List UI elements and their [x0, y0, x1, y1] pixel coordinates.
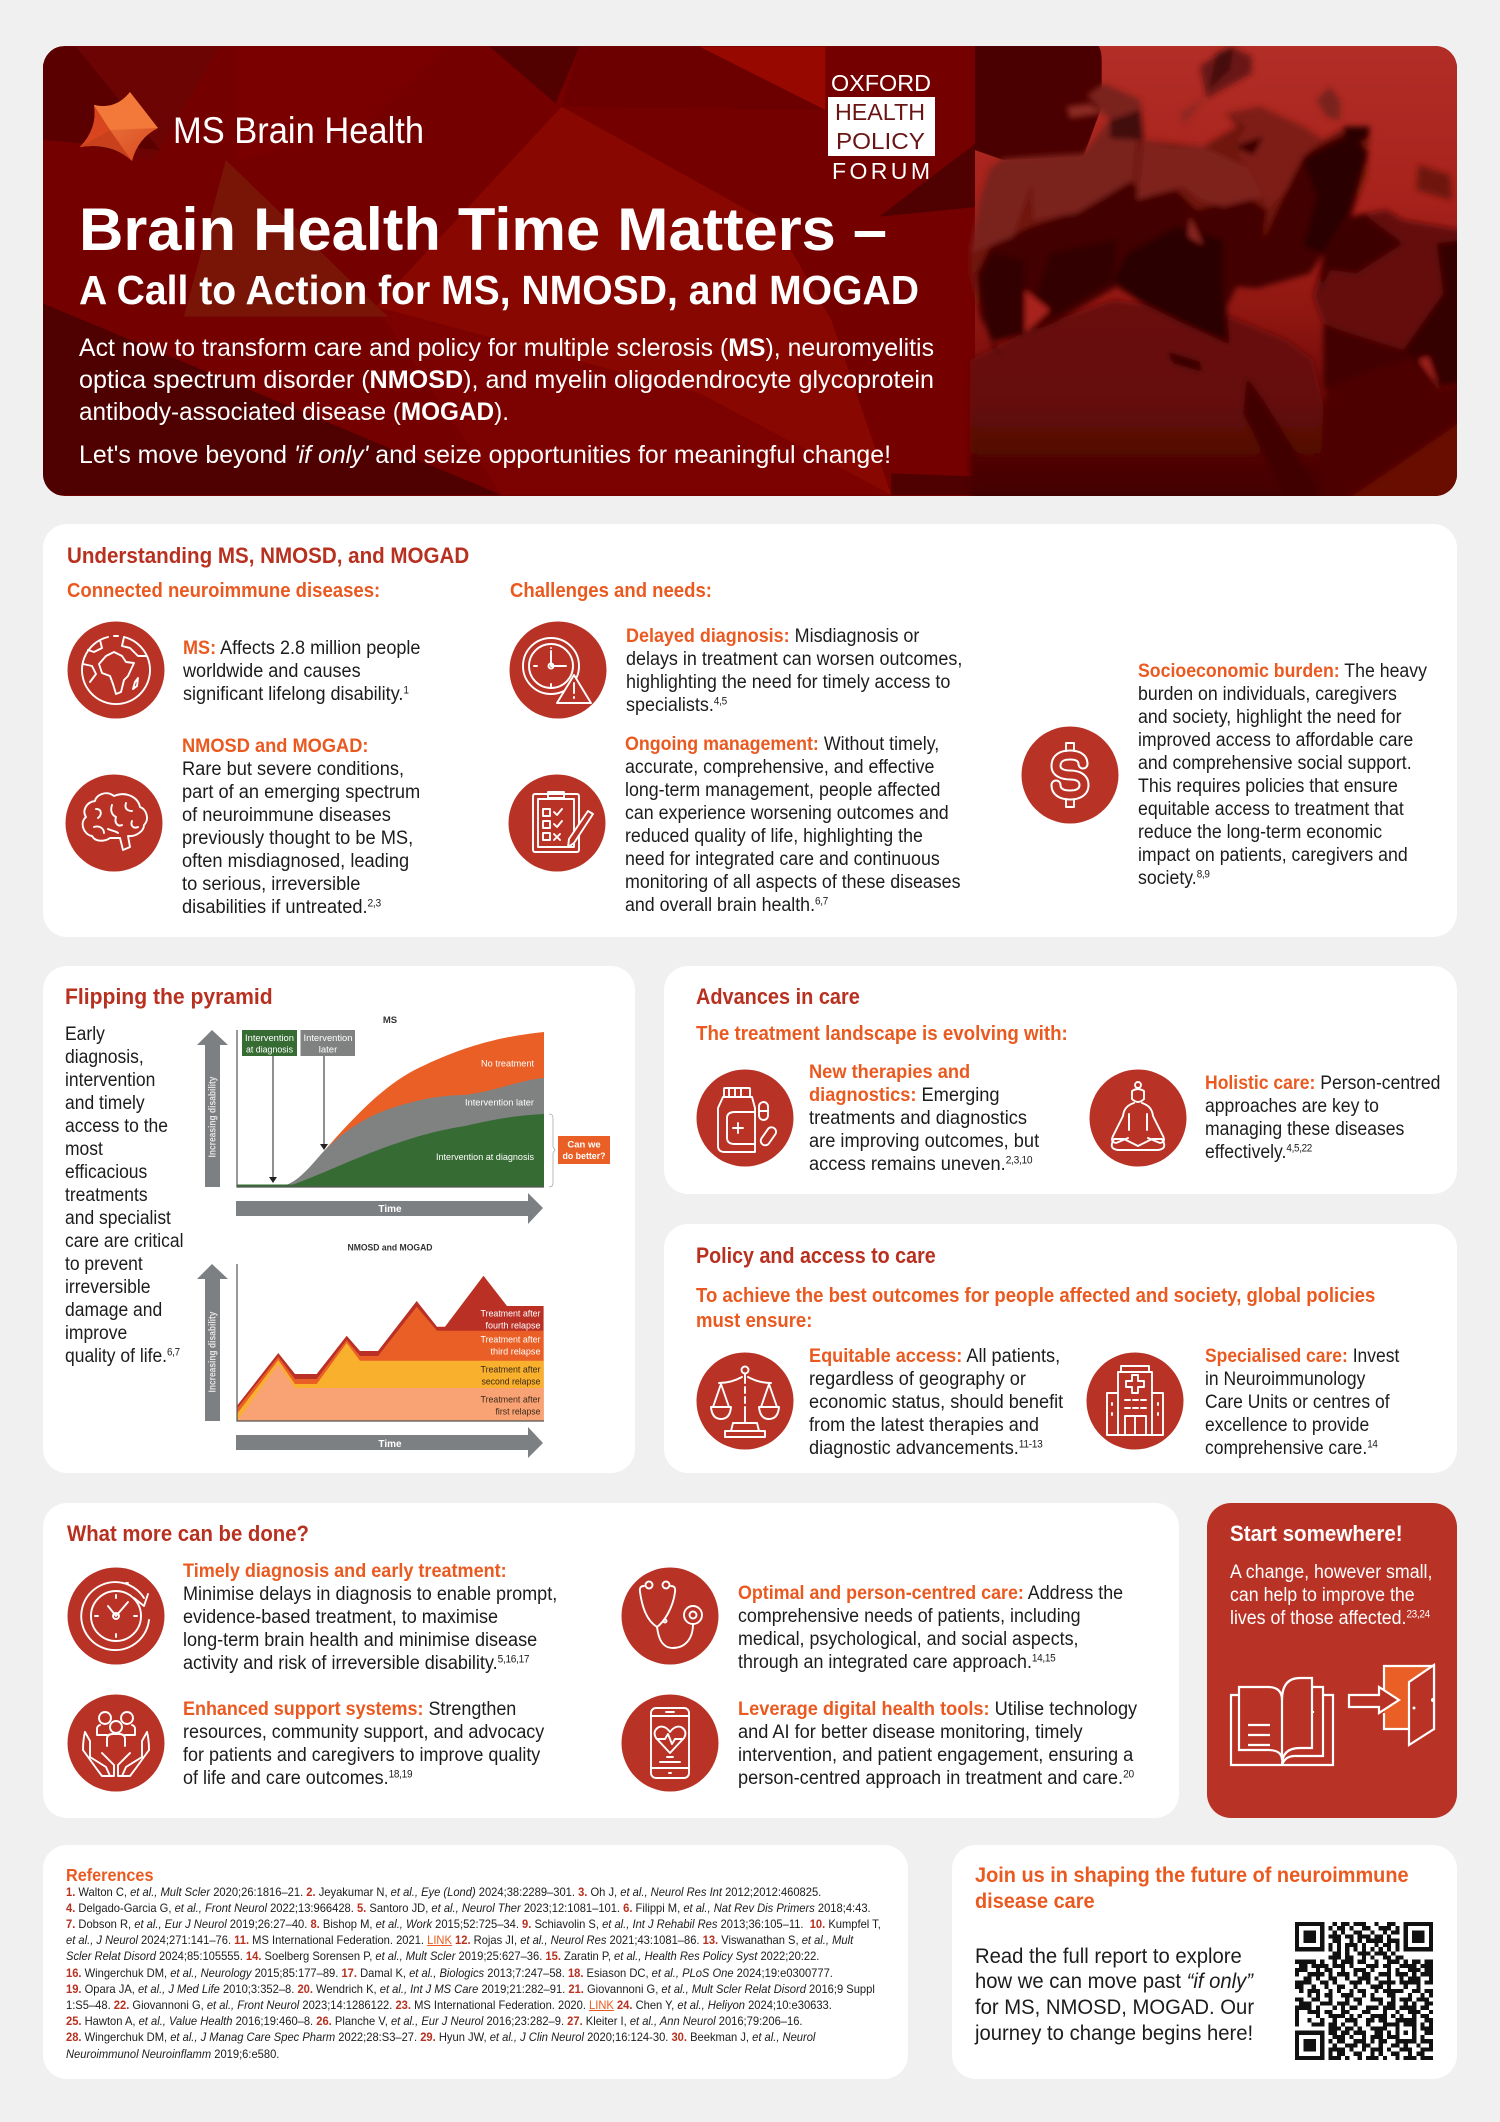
text: early diagnosis: access to the	[65, 1116, 168, 1136]
reference list: 25. Hawton A, et al., Value Health 2016;19:460–8. 26. Planche V, et al., Eur J Neurol 2016;23:282–9. 27. Kleiter I, et al., Ann Neurol 2016;79:206–16.	[66, 2014, 803, 2028]
text: delayed diagnosis: specialists.4,5	[626, 694, 727, 716]
text: enhanced support	[183, 1699, 544, 1789]
reference list: 1:S5–48. 22. Giovannoni G, et al., Front Neurol 2023;14:1286122. 23. MS International Federation. 2020. LINK 24. Chen Y, et al., Heliyon 2024;10:e30633.	[66, 1998, 832, 2012]
text: equitable access: economic status, should benefit	[809, 1392, 1063, 1412]
chart: MS: at diagnosis	[246, 1044, 293, 1056]
icon: stethoscope	[622, 1568, 718, 1664]
text: early diagnosis: and timely	[65, 1092, 145, 1114]
icon: brain	[66, 774, 162, 872]
chart: MS: MS	[383, 1015, 397, 1026]
text: ongoing management: reduced quality of life, highlighting the	[625, 826, 923, 846]
text: early diagnosis: Early	[65, 1024, 105, 1044]
panel: references	[43, 1845, 908, 2079]
text: enhanced support: Enhanced support systems: Strengthen	[183, 1699, 516, 1720]
call to action line: Let's move beyond 'if only' and seize opportunities for meaningful change!	[79, 441, 891, 469]
chart: MS: No treatment	[481, 1058, 534, 1070]
text: MS: MS: Affects 2.8 million people	[183, 638, 420, 659]
chart: NMOSD and MOGAD: Treatment after	[480, 1308, 540, 1320]
text: read the full report: Read the full report to explore	[975, 1944, 1242, 1968]
text: optimal care: Optimal and person-centred care: Address the	[738, 1582, 1123, 1604]
heading: What more can be done?	[67, 1521, 309, 1546]
subheading: connected diseases: Connected neuroimmune diseases:	[67, 580, 380, 602]
text: MS	[183, 638, 420, 705]
heading: References	[66, 1865, 153, 1885]
chart: NMOSD and MOGAD: Treatment after	[480, 1334, 540, 1346]
text: optimal care	[738, 1582, 1123, 1672]
intro text: Act now to transform care and policy for multiple sclerosis (MS), neuromyelitis	[79, 334, 934, 362]
text: socioeconomic burden: society.8,9	[1138, 868, 1210, 888]
text: MS: significant lifelong disability.1	[183, 684, 409, 705]
text: holistic care: approaches are key to	[1205, 1096, 1379, 1117]
icon: clock warning	[510, 622, 606, 718]
text: a change: can help to improve the	[1230, 1584, 1415, 1606]
chart: NMOSD and MOGAD: NMOSD and MOGAD	[348, 1242, 433, 1254]
text: timely diagnosis	[183, 1560, 557, 1674]
text: early diagnosis: quality of life.6,7	[65, 1346, 180, 1366]
panel: join us	[952, 1845, 1457, 2079]
text: enhanced support: resources, community support, and advocacy	[183, 1722, 544, 1743]
icon: people in hands	[68, 1694, 164, 1792]
text: a change: lives of those affected.23,24	[1230, 1608, 1430, 1628]
text: equitable access: regardless of geography or	[809, 1368, 1026, 1390]
text: MS: worldwide and causes	[183, 661, 361, 682]
chart: NMOSD and MOGAD: Time	[378, 1439, 402, 1450]
reference list: 1. Walton C, et al., Mult Scler 2020;26:1816–21. 2. Jeyakumar N, et al., Eye (Lond) 2024;38:2289–301. 3. Oh J, et al., Neurol Res Int 2012;2012:460825.	[66, 1884, 821, 1898]
text: early diagnosis: to prevent	[65, 1254, 143, 1274]
text: timely diagnosis: Minimise delays in diagnosis to enable prompt,	[183, 1584, 557, 1604]
chart: MS: Intervention	[245, 1033, 294, 1044]
text: socioeconomic burden: and society, highlight the need for	[1138, 706, 1402, 728]
text: socioeconomic burden: impact on patients, caregivers and	[1138, 844, 1408, 866]
text: socioeconomic burden: and comprehensive social support.	[1138, 752, 1412, 774]
icon: globe	[68, 622, 164, 718]
text: optimal care: medical, psychological, and social aspects,	[738, 1628, 1079, 1650]
text: NMOSD and MOGAD: of neuroimmune diseases	[182, 804, 391, 826]
text: delayed diagnosis: highlighting the need for timely access to	[626, 672, 950, 692]
text: NMOSD and MOGAD: often misdiagnosed, leading	[182, 850, 409, 872]
text: NMOSD and MOGAD: part of an emerging spectrum	[182, 782, 420, 802]
text: early diagnosis: most	[65, 1138, 103, 1160]
text: early diagnosis: and specialist	[65, 1208, 171, 1228]
icon: dollar	[1022, 726, 1118, 824]
text: a change: A change, however small,	[1230, 1562, 1432, 1582]
text: specialised care: Specialised care: Invest	[1205, 1346, 1399, 1366]
text: read the full report: how we can move past “if only”	[975, 1969, 1253, 1993]
text: specialised care: comprehensive care.14	[1205, 1438, 1378, 1458]
text: enhanced support: of life and care outcomes.18,19	[183, 1768, 412, 1789]
text: socioeconomic burden: burden on individuals, caregivers	[1138, 684, 1397, 704]
text: timely diagnosis: long-term brain health and minimise disease	[183, 1630, 537, 1650]
text: digital health: and AI for better disease monitoring, timely	[738, 1722, 1083, 1743]
text: new therapies: diagnostics: Emerging	[809, 1084, 1000, 1106]
text: digital health	[738, 1699, 1137, 1789]
heading: Advances in care	[696, 984, 860, 1009]
text: early diagnosis: improve	[65, 1322, 127, 1344]
reference list: Neuroimmunol Neuroinflamm 2019;6:e580.	[66, 2047, 279, 2061]
text: socioeconomic burden: This requires policies that ensure	[1138, 776, 1398, 796]
text: ongoing management	[625, 734, 960, 916]
intro text	[79, 334, 934, 426]
chart: NMOSD and MOGAD: Increasing disability	[208, 1311, 218, 1392]
icon: open book and door	[1230, 1662, 1436, 1766]
text: digital health: intervention, and patient engagement, ensuring a	[738, 1745, 1133, 1766]
text: NMOSD and MOGAD: previously thought to be MS,	[182, 828, 413, 848]
chart: NMOSD and MOGAD: fourth relapse	[486, 1320, 540, 1332]
reference list: 19. Opara JA, et al., J Med Life 2010;3:352–8. 20. Wendrich K, et al., Int J MS Care 2019;21:282–91. 21. Giovannoni G, et al., Mult Scler Relat Disord 2016;9 Suppl	[66, 1982, 875, 1996]
text: specialised care: excellence to provide	[1205, 1414, 1369, 1436]
text: new therapies: New therapies and	[809, 1062, 970, 1082]
chart: MS: do better?	[562, 1151, 606, 1162]
text: ongoing management: long-term management, people affected	[625, 780, 940, 800]
text: equitable access: from the latest therapies and	[809, 1414, 1039, 1436]
text: delayed diagnosis: delays in treatment can worsen outcomes,	[626, 648, 962, 670]
text: delayed diagnosis: Delayed diagnosis: Misdiagnosis or	[626, 626, 919, 646]
chart: NMOSD and MOGAD: Treatment after	[480, 1364, 540, 1376]
icon: phone heart	[622, 1694, 718, 1792]
text: timely diagnosis: Timely diagnosis and early treatment:	[183, 1560, 507, 1582]
reference list: 4. Delgado-Garcia G, et al., Front Neurol 2022;13:966428. 5. Santoro JD, et al., Neurol Ther 2023;12:1081–101. 6. Filippi M, et al., Nat Rev Dis Primers 2018;4:43.	[66, 1901, 871, 1915]
reference list: Scler Relat Disord 2024;85:105555. 14. Soelberg Sorensen P, et al., Mult Scler 2019;25:627–36. 15. Zaratin P, et al., Health Res Policy Syst 2022;20:22.	[66, 1949, 819, 1963]
text: NMOSD and MOGAD: NMOSD and MOGAD:	[182, 736, 368, 756]
text: ongoing management: need for integrated care and continuous	[625, 848, 940, 870]
text: NMOSD and MOGAD: to serious, irreversible	[182, 874, 360, 894]
panel: start somewhere	[1207, 1503, 1457, 1818]
text: ongoing management: can experience worsening outcomes and	[625, 802, 949, 824]
panel: advances in care	[664, 966, 1457, 1194]
text: delayed diagnosis	[626, 626, 962, 716]
panel: understanding	[43, 524, 1457, 937]
text: early diagnosis	[65, 1024, 184, 1366]
logo: MS Brain Health	[80, 92, 424, 161]
panel: what more can be done	[43, 1503, 1179, 1818]
header banner	[43, 46, 1457, 496]
text: digital health: Leverage digital health tools: Utilise technology	[738, 1699, 1137, 1720]
text: a change	[1230, 1562, 1432, 1628]
text: new therapies: are improving outcomes, but	[809, 1130, 1039, 1152]
chart: MS: Intervention	[304, 1033, 352, 1044]
heading	[975, 1864, 1409, 1913]
logo: Oxford Health Policy Forum: HEALTH	[835, 99, 925, 125]
reference list: 16. Wingerchuk DM, et al., Neurology 2015;85:177–89. 17. Damal K, et al., Biologics 2013;7:247–58. 18. Esiason DC, et al., PLoS One 2024;19:e0300777.	[66, 1966, 833, 1980]
text: early diagnosis: care are critical	[65, 1230, 184, 1252]
chart: MS	[197, 1015, 610, 1224]
text: socioeconomic burden	[1138, 660, 1427, 888]
text: enhanced support: for patients and caregivers to improve quality	[183, 1745, 540, 1766]
text: socioeconomic burden: improved access to affordable care	[1138, 730, 1413, 750]
logo: Oxford Health Policy Forum: FORUM	[832, 158, 930, 184]
logo: Oxford Health Policy Forum: OXFORD	[831, 70, 931, 96]
text: NMOSD and MOGAD: disabilities if untreated.2,3	[182, 896, 381, 918]
text: equitable access: Equitable access: All patients,	[809, 1346, 1060, 1366]
text: socioeconomic burden: equitable access to treatment that	[1138, 798, 1404, 820]
heading: Start somewhere!	[1230, 1521, 1403, 1546]
text: equitable access	[809, 1346, 1064, 1458]
subheading	[696, 1285, 1375, 1332]
text: digital health: person-centred approach in treatment and care.20	[738, 1768, 1134, 1789]
heading: Understanding MS, NMOSD, and MOGAD	[67, 543, 469, 568]
text: timely diagnosis: evidence-based treatment, to maximise	[183, 1606, 498, 1628]
icon: checklist	[508, 774, 606, 872]
text: NMOSD and MOGAD	[182, 736, 420, 918]
text: early diagnosis: damage and	[65, 1300, 162, 1320]
text: specialised care	[1205, 1346, 1400, 1458]
chart: MS: Intervention at diagnosis	[436, 1152, 534, 1163]
panel: flipping the pyramid	[43, 966, 635, 1473]
reference list: 7. Dobson R, et al., Eur J Neurol 2019;26:27–40. 8. Bishop M, et al., Work 2015;52:725–34. 9. Schiavolin S, et al., Int J Rehabil Res 2013;36:105–11. 10. Kumpfel T,	[66, 1917, 881, 1931]
heading: Flipping the pyramid	[65, 984, 273, 1009]
chart: NMOSD and MOGAD: first relapse	[496, 1406, 540, 1418]
chart: disability over time	[197, 1015, 610, 1458]
text: socioeconomic burden: reduce the long-term economic	[1138, 822, 1382, 842]
reference list: 28. Wingerchuk DM, et al., J Manag Care Spec Pharm 2022;28:S3–27. 29. Hyun JW, et al., J Clin Neurol 2020;16:124-30. 30. Beekman J, et al., Neurol	[66, 2030, 815, 2044]
text: new therapies	[809, 1062, 1040, 1174]
subheading: To achieve the best outcomes for people affected and society, global policies	[696, 1285, 1375, 1307]
QR code	[1295, 1922, 1433, 2060]
chart: MS: later	[319, 1044, 337, 1056]
text: holistic care: managing these diseases	[1205, 1119, 1404, 1140]
text: early diagnosis: efficacious	[65, 1162, 147, 1182]
subtitle: A Call to Action for MS, NMOSD, and MOGAD	[79, 267, 919, 313]
background facets	[43, 47, 980, 495]
text: read the full report: journey to change begins here!	[975, 2021, 1253, 2045]
text: timely diagnosis: activity and risk of irreversible disability.5,16,17	[183, 1652, 529, 1674]
text: early diagnosis: intervention	[65, 1070, 155, 1090]
text: new therapies: access remains uneven.2,3,10	[809, 1154, 1032, 1174]
chart: NMOSD and MOGAD	[197, 1242, 544, 1458]
text: ongoing management: accurate, comprehensive, and effective	[625, 756, 934, 778]
text: ongoing management: Ongoing management: Without timely,	[625, 734, 939, 754]
text: early diagnosis: treatments	[65, 1184, 148, 1206]
subheading: challenges: Challenges and needs:	[510, 580, 712, 602]
heading: Join us in shaping the future of neuroimmune	[975, 1864, 1409, 1887]
text: optimal care: comprehensive needs of patients, including	[738, 1606, 1081, 1626]
text: early diagnosis: irreversible	[65, 1276, 150, 1298]
text: specialised care: Care Units or centres of	[1205, 1392, 1390, 1412]
intro text: antibody-associated disease (MOGAD).	[79, 398, 509, 426]
text: new therapies: treatments and diagnostics	[809, 1108, 1027, 1128]
chart: MS: Intervention later	[465, 1098, 534, 1108]
chart: MS: Increasing disability	[208, 1076, 218, 1158]
reference list	[66, 1884, 881, 2061]
logo: Oxford Health Policy Forum: POLICY	[836, 128, 925, 154]
text: specialised care: in Neuroimmunology	[1205, 1368, 1365, 1390]
subheading: must ensure:	[696, 1310, 812, 1332]
text: ongoing management: monitoring of all aspects of these diseases	[625, 872, 960, 892]
text: read the full report: for MS, NMOSD, MOGAD. Our	[975, 1995, 1254, 2019]
icon: medicine bottle	[696, 1070, 794, 1166]
text: early diagnosis: diagnosis,	[65, 1046, 144, 1068]
icon: timer	[68, 1568, 164, 1664]
heading: disease care	[975, 1890, 1095, 1913]
icon: scales	[696, 1352, 794, 1450]
photo: sculpture figures	[970, 40, 1463, 507]
text: NMOSD and MOGAD: Rare but severe conditions,	[182, 758, 404, 780]
text: holistic care	[1205, 1073, 1440, 1163]
heading: Policy and access to care	[696, 1243, 936, 1268]
intro text: optica spectrum disorder (NMOSD), and myelin oligodendrocyte glycoprotein	[79, 366, 934, 394]
reference list: et al., J Neurol 2024;271:141–76. 11. MS International Federation. 2021. LINK 12. Rojas JI, et al., Neurol Res 2021;43:1081–86. 13. Viswanathan S, et al., Mult	[66, 1933, 853, 1947]
title: Brain Health Time Matters –	[79, 196, 887, 263]
panel: policy and access	[664, 1224, 1457, 1473]
icon: meditation	[1090, 1070, 1186, 1166]
chart: MS: Can we	[567, 1140, 601, 1150]
text: holistic care: effectively.4,5,22	[1205, 1142, 1312, 1163]
text: equitable access: diagnostic advancements.11-13	[809, 1438, 1042, 1458]
chart: NMOSD and MOGAD: second relapse	[482, 1376, 540, 1388]
logo: Oxford Health Policy Forum	[828, 70, 935, 184]
text: socioeconomic burden: Socioeconomic burden: The heavy	[1138, 660, 1427, 682]
chart: MS: Time	[378, 1204, 402, 1215]
logo: MS Brain Health: MS Brain Health	[173, 110, 424, 151]
text: read the full report	[974, 1944, 1254, 2045]
chart: NMOSD and MOGAD: Treatment after	[480, 1394, 540, 1406]
subheading: The treatment landscape is evolving with:	[696, 1023, 1068, 1045]
icon: hospital	[1086, 1352, 1184, 1450]
text: ongoing management: and overall brain health.6,7	[625, 894, 828, 916]
chart: NMOSD and MOGAD: third relapse	[490, 1346, 540, 1358]
text: holistic care: Holistic care: Person-centred	[1205, 1073, 1440, 1094]
text: optimal care: through an integrated care approach.14,15	[738, 1652, 1055, 1672]
